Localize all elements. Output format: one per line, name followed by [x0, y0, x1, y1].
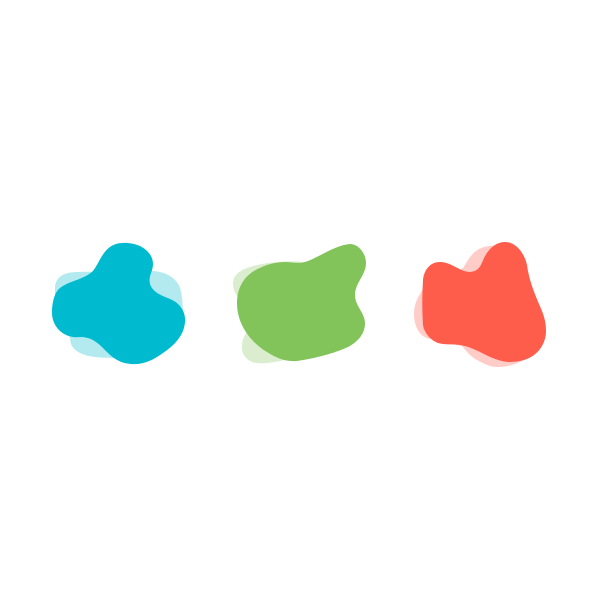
icon: green blob [233, 244, 366, 363]
icon: teal blob [52, 243, 185, 364]
icon: red blob [414, 242, 546, 367]
